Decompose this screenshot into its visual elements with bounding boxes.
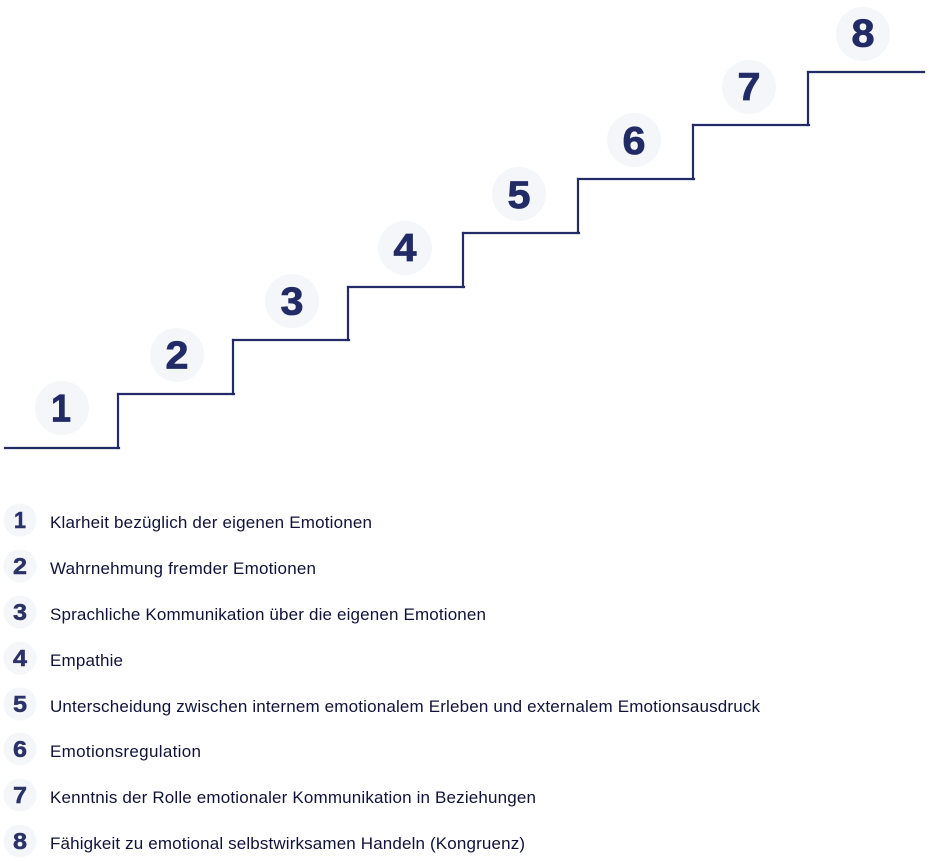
step 4 badge: 4 [394,227,417,270]
legend item 7: 7 [13,782,27,808]
legend item 7: Kenntnis der Rolle emotionaler Kommunikation in Beziehungen [50,788,536,807]
step 8 badge [836,7,890,61]
legend item 5: 5 [13,691,27,717]
step 3 badge: 3 [280,280,304,324]
step 7 badge [722,60,776,114]
legend item 2 [4,550,316,582]
legend item 5: Unterscheidung zwischen internem emotionalem Erleben und externalem Emotionsausdruck [50,697,760,716]
legend item 4 [4,642,123,674]
legend item 2: Wahrnehmung fremder Emotionen [50,559,316,578]
legend item 4: Empathie [50,651,123,670]
legend item 6: 6 [13,736,27,762]
step 7 badge: 7 [738,66,760,109]
legend item 1 [4,504,372,536]
legend item 1: 1 [14,507,26,533]
step 3 badge [265,274,319,328]
legend item 8: Fähigkeit zu emotional selbstwirksamen Handeln (Kongruenz) [50,834,525,853]
step 4 badge [378,221,432,275]
legend item 8: 8 [13,828,27,854]
legend item 3 [4,596,486,628]
legend item 6 [4,732,201,766]
legend item 1: Klarheit bezüglich der eigenen Emotionen [50,513,372,532]
legend item 6: Emotionsregulation [50,742,201,761]
legend item 4: 4 [13,645,27,671]
step 5 badge [492,167,546,221]
legend item 2: 2 [13,553,27,579]
step 1 badge: 1 [51,388,71,430]
step 5 badge: 5 [508,174,530,217]
step 6 badge: 6 [622,120,646,163]
step 6 badge [607,113,661,167]
legend item 8 [4,824,525,858]
legend item 3: Sprachliche Kommunikation über die eigenen Emotionen [50,605,486,624]
legend item 5 [4,688,760,720]
legend item 7 [4,778,536,812]
legend item 3: 3 [13,599,27,625]
step 2 badge [150,328,204,382]
step 8 badge: 8 [852,12,874,56]
staircase line [5,72,924,448]
step 2 badge: 2 [166,334,188,378]
step 1 badge [35,381,89,435]
